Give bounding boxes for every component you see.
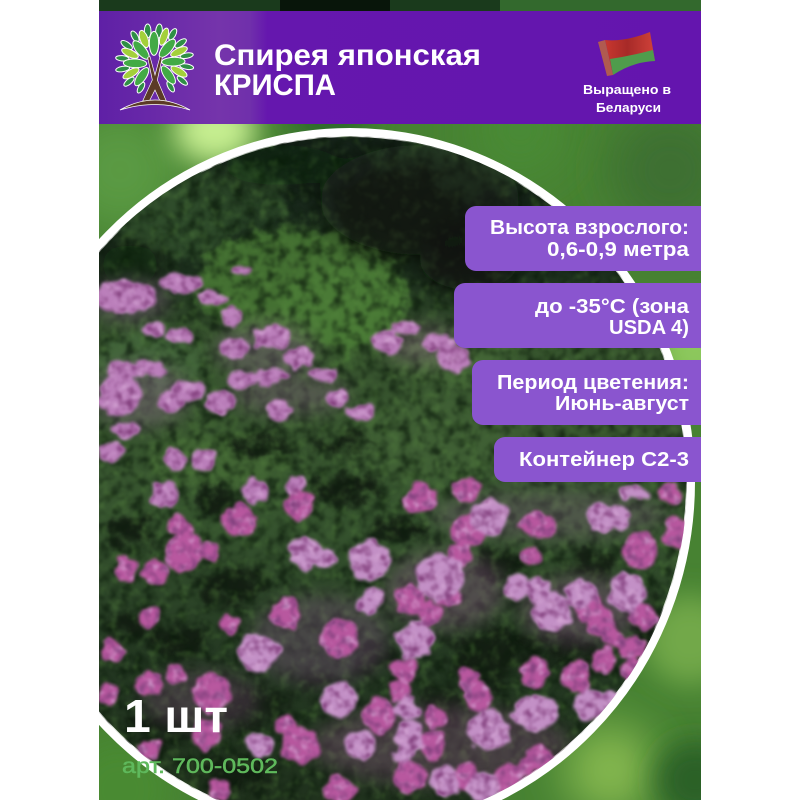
badge: frost hardiness: до -35°C (зона — [535, 296, 690, 318]
title — [214, 39, 481, 102]
caption: grown in Belarus — [583, 83, 671, 115]
logo: tree — [115, 24, 194, 110]
badge: mature height — [465, 200, 800, 280]
badge: frost hardiness: USDA 4) — [609, 317, 689, 339]
badge: flowering period: Июнь-август — [555, 393, 689, 415]
badge: flowering period — [472, 356, 800, 429]
photo background: blurred green garden — [99, 0, 701, 800]
caption: grown in Belarus: Беларуси — [596, 101, 661, 115]
badge: mature height: Высота взрослого: — [490, 217, 689, 239]
foliage and flowers — [90, 120, 701, 800]
photo: spirea bush in oval frame — [99, 128, 695, 800]
caption: grown in Belarus: Выращено в — [583, 83, 671, 97]
title: КРИСПА — [214, 69, 336, 102]
badge: container — [494, 433, 800, 486]
badge: flowering period: Период цветения: — [497, 372, 689, 394]
header band — [99, 11, 701, 124]
badge: frost hardiness — [454, 280, 800, 352]
quantity label: 1 шт — [124, 690, 228, 742]
badge: mature height: 0,6-0,9 метра — [547, 239, 690, 261]
badge: container: Контейнер С2-3 — [519, 449, 689, 471]
article number: арт. 700-0502 — [122, 755, 278, 778]
white oval frame — [99, 128, 695, 800]
icon: flag of Belarus — [598, 32, 655, 76]
title: Спирея японская — [214, 39, 481, 72]
